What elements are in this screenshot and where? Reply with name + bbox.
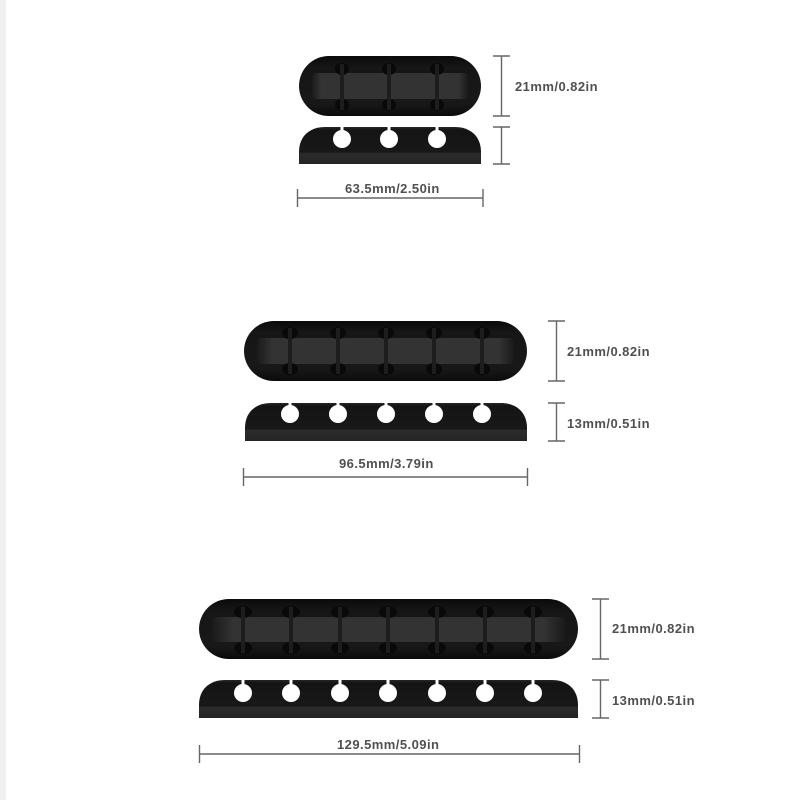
label: large width: 129.5mm/5.09in [337, 737, 439, 752]
label: small height: 21mm/0.82in [515, 79, 598, 94]
product: large clip top view [199, 599, 578, 659]
label: medium side height: 13mm/0.51in [567, 416, 650, 431]
product: medium clip top view [244, 321, 527, 381]
product: small clip side view [299, 126, 481, 164]
product: small clip top view [299, 56, 481, 116]
product: medium clip side view [245, 402, 527, 441]
dimension: small height side [493, 127, 510, 164]
label: large height: 21mm/0.82in [612, 621, 695, 636]
left margin strip [0, 0, 6, 800]
dimension: large width [200, 745, 580, 763]
label: large side height: 13mm/0.51in [612, 693, 695, 708]
dimension: small width [298, 189, 483, 207]
dimension: small height top [493, 56, 510, 116]
dimension: large height top [592, 599, 609, 659]
dimension: medium width [244, 468, 528, 486]
dimension: medium height top [548, 321, 565, 381]
label: small width: 63.5mm/2.50in [345, 181, 440, 196]
label: medium height: 21mm/0.82in [567, 344, 650, 359]
product: large clip side view [199, 679, 578, 718]
label: medium width: 96.5mm/3.79in [339, 456, 434, 471]
dimension: medium height side [548, 403, 565, 441]
dimension: large height side [592, 680, 609, 718]
